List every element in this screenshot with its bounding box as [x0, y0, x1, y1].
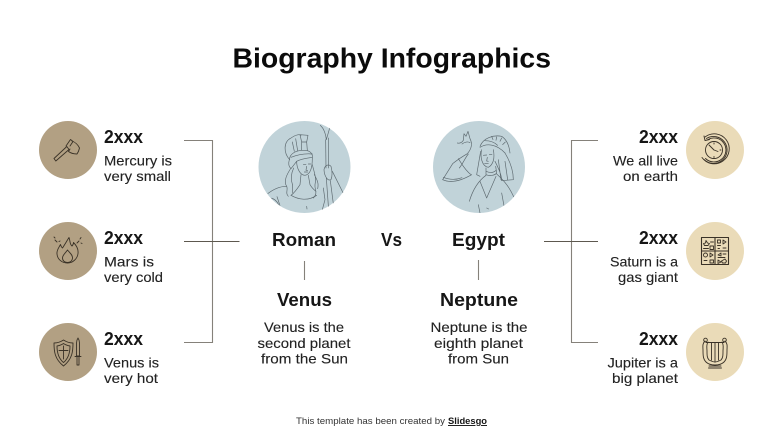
text: Neptune description: Neptune is the — [430, 319, 528, 335]
text: Venus description: second planet — [258, 335, 351, 351]
icon: clock with swirl — [686, 121, 744, 179]
description: Saturn is a — [610, 254, 678, 270]
text: Venus description: Venus is the — [264, 319, 344, 335]
description: We all live — [613, 152, 678, 168]
column heading: Egypt: Egypt — [452, 230, 505, 250]
year: 2xxx — [639, 329, 678, 349]
icon: flame — [39, 222, 97, 280]
left bracket connector — [184, 140, 240, 342]
left item: Mars — [39, 222, 163, 285]
year: 2xxx — [639, 228, 678, 248]
right item: Jupiter — [608, 323, 744, 386]
year: 2xxx — [639, 127, 678, 147]
icon: axe — [39, 121, 97, 179]
text: Neptune description: from Sun — [448, 350, 509, 366]
year: 2xxx — [104, 329, 143, 349]
year: 2xxx — [104, 228, 143, 248]
description: Mars is — [104, 254, 154, 270]
right item: Saturn — [610, 222, 744, 285]
left item: Mercury — [39, 121, 172, 184]
divider: Egypt — [478, 260, 480, 280]
footer credit: Slidesgo — [448, 416, 487, 427]
divider: Roman — [304, 261, 306, 280]
left item: Venus — [39, 323, 159, 386]
versus label: Vs — [381, 230, 402, 250]
right item: Earth — [613, 121, 744, 184]
portrait: Egyptian queen — [433, 121, 525, 213]
description: big planet — [612, 370, 678, 386]
column heading: Roman: Roman — [272, 230, 336, 250]
year: 2xxx — [104, 127, 143, 147]
text: Neptune description: eighth planet — [434, 335, 523, 351]
description: gas giant — [618, 269, 678, 285]
title: Biography Infographics — [232, 42, 551, 74]
subheading: Venus: Venus — [277, 290, 332, 310]
icon: symbol board — [686, 222, 744, 280]
description: on earth — [623, 168, 678, 184]
right bracket connector — [544, 140, 598, 342]
text: Venus description: from the Sun — [261, 350, 348, 366]
icon: lyre — [686, 323, 744, 381]
portrait: Roman warrior — [258, 121, 350, 215]
description: Mercury is — [104, 152, 172, 168]
description: Venus is — [104, 354, 159, 370]
description: very cold — [104, 269, 163, 285]
description: very small — [104, 168, 171, 184]
subheading: Neptune: Neptune — [440, 290, 518, 310]
footer credit: This template has been created by — [296, 416, 445, 427]
description: very hot — [104, 370, 158, 386]
icon: shield and dagger — [39, 323, 97, 381]
description: Jupiter is a — [608, 354, 678, 370]
